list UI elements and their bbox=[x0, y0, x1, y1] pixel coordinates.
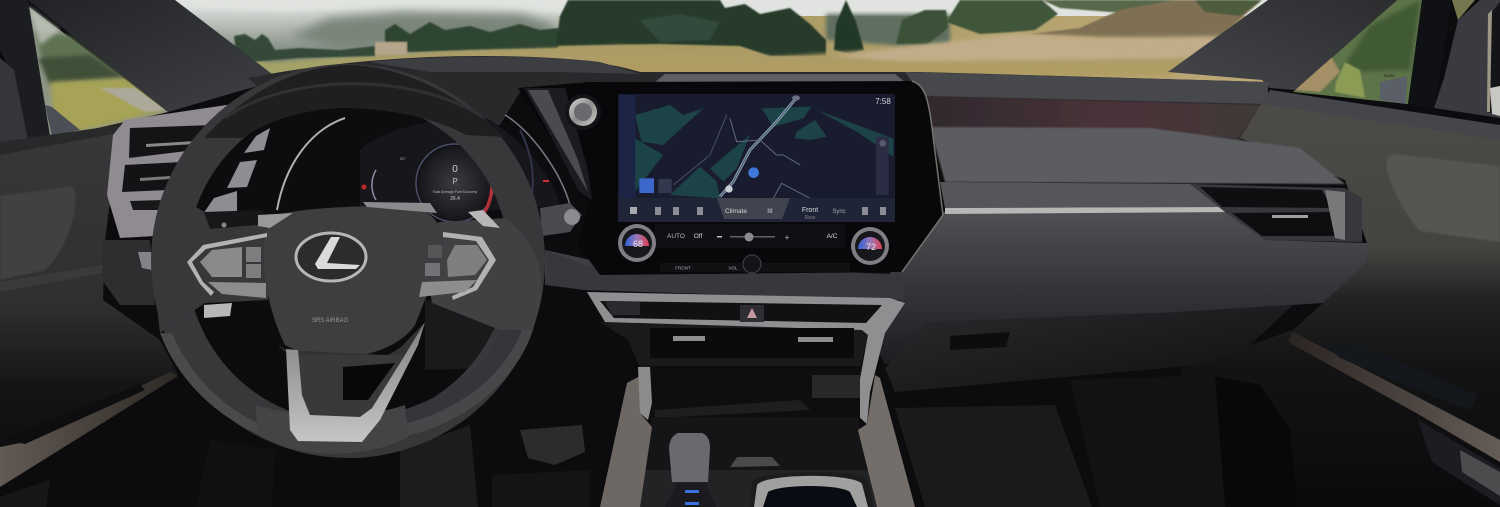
dark top rim section bbox=[204, 65, 505, 138]
tray notch bbox=[730, 457, 780, 467]
climate control strip: Rear bbox=[805, 215, 816, 221]
hub cover bbox=[264, 206, 443, 358]
lower climate bar: + bbox=[785, 233, 790, 242]
left door panel bbox=[0, 125, 178, 507]
left spoke mass bbox=[152, 206, 270, 333]
right stalk control bbox=[540, 203, 582, 236]
glossy trim bbox=[524, 88, 592, 200]
dark door pocket bbox=[1210, 375, 1297, 507]
gear shifter bbox=[665, 433, 716, 507]
lower climate bar: Off bbox=[694, 233, 702, 240]
steering wheel bbox=[152, 65, 542, 454]
map patches bbox=[635, 105, 893, 198]
climate control strip: Climate bbox=[725, 208, 747, 215]
top hub silver accents bbox=[363, 202, 437, 213]
hazard button bbox=[740, 305, 764, 322]
speed gauge: 26.4 bbox=[450, 196, 460, 202]
hardware button strip bbox=[660, 255, 850, 273]
right A-pillar and door frame bbox=[1168, 0, 1500, 118]
touchscreen bbox=[618, 94, 895, 222]
speed gauge: 0 bbox=[452, 164, 458, 175]
airbag label: SRS AIRBAG bbox=[312, 318, 348, 324]
window switch panel bbox=[2, 384, 145, 444]
door suede insert bbox=[1386, 154, 1500, 242]
right spoke mass bbox=[420, 218, 542, 330]
left temperature knob bbox=[618, 224, 656, 262]
left nav rail bbox=[619, 95, 635, 198]
left side window bbox=[28, 6, 168, 140]
cup holder bbox=[750, 472, 873, 507]
lower climate bar: A/C bbox=[827, 233, 838, 240]
silver cluster hood arc bbox=[277, 118, 345, 210]
door armrest trim bbox=[0, 372, 178, 487]
glove box bbox=[885, 305, 1293, 392]
left console trim bbox=[600, 376, 652, 507]
upper dashboard band bbox=[248, 56, 1268, 140]
wheel rim bbox=[169, 82, 527, 440]
speed gauge: Total Average Fuel Economy bbox=[433, 190, 477, 194]
left stalk control bbox=[204, 210, 293, 229]
chrome trim strip bbox=[945, 207, 1236, 214]
right temperature knob bbox=[851, 227, 889, 265]
left button plate bbox=[187, 233, 267, 298]
right console trim bbox=[858, 375, 915, 507]
left silver drop bbox=[638, 367, 652, 420]
right air vent bbox=[1190, 184, 1362, 242]
center console bbox=[600, 366, 915, 507]
door pull bbox=[1418, 420, 1500, 505]
route line bbox=[720, 98, 796, 197]
silver vent frame bbox=[587, 292, 905, 424]
right temperature knob: 72 bbox=[866, 242, 876, 252]
lower climate bar: AUTO bbox=[667, 233, 685, 240]
climate control strip: Front bbox=[802, 207, 818, 214]
door armrest trim bbox=[1288, 332, 1500, 462]
center vents and silver frame bbox=[587, 292, 905, 424]
right side window bbox=[1293, 0, 1422, 104]
right door panel bbox=[1180, 90, 1500, 507]
left temperature knob: 68 bbox=[633, 239, 643, 249]
position marker bbox=[748, 167, 759, 178]
speed gauge: P bbox=[452, 177, 458, 186]
climate control strip: Sync bbox=[832, 209, 846, 215]
right button plate bbox=[419, 232, 496, 300]
lower left rim section bbox=[160, 333, 262, 434]
windshield landscape bbox=[170, 0, 1270, 82]
lower vent bank bbox=[650, 328, 854, 358]
floor mats and pedal bbox=[196, 375, 1225, 507]
usb port plate bbox=[812, 375, 860, 398]
left air vent bezel bbox=[102, 103, 240, 305]
instrument cluster behind wheel: 55° bbox=[400, 156, 406, 161]
emblem bbox=[296, 233, 366, 281]
lower right rim section bbox=[403, 330, 533, 436]
main dashboard fascia bbox=[545, 127, 1367, 392]
right side window: SUZU bbox=[1384, 73, 1395, 78]
right column behind wheel bbox=[425, 300, 495, 370]
power knob bbox=[565, 94, 601, 130]
speed gauge bbox=[416, 144, 494, 222]
lower climate bar bbox=[655, 224, 845, 248]
hardware button strip: VOL bbox=[728, 266, 738, 270]
center screen housing bbox=[518, 81, 943, 275]
silver stalk shadow piece bbox=[204, 303, 232, 318]
bottom rim hub bbox=[255, 405, 408, 454]
climate control strip bbox=[618, 198, 895, 222]
status clock: 7:58 bbox=[875, 97, 891, 106]
door suede insert bbox=[0, 186, 75, 280]
silver cluster slats bbox=[203, 128, 270, 214]
lower silver spoke bbox=[286, 322, 425, 442]
left A-pillar bbox=[0, 0, 280, 142]
climate control strip: III bbox=[767, 208, 773, 215]
hardware button strip: FRONT bbox=[675, 266, 691, 270]
instrument cluster behind wheel bbox=[203, 105, 580, 240]
window switch panel bbox=[1323, 342, 1477, 410]
